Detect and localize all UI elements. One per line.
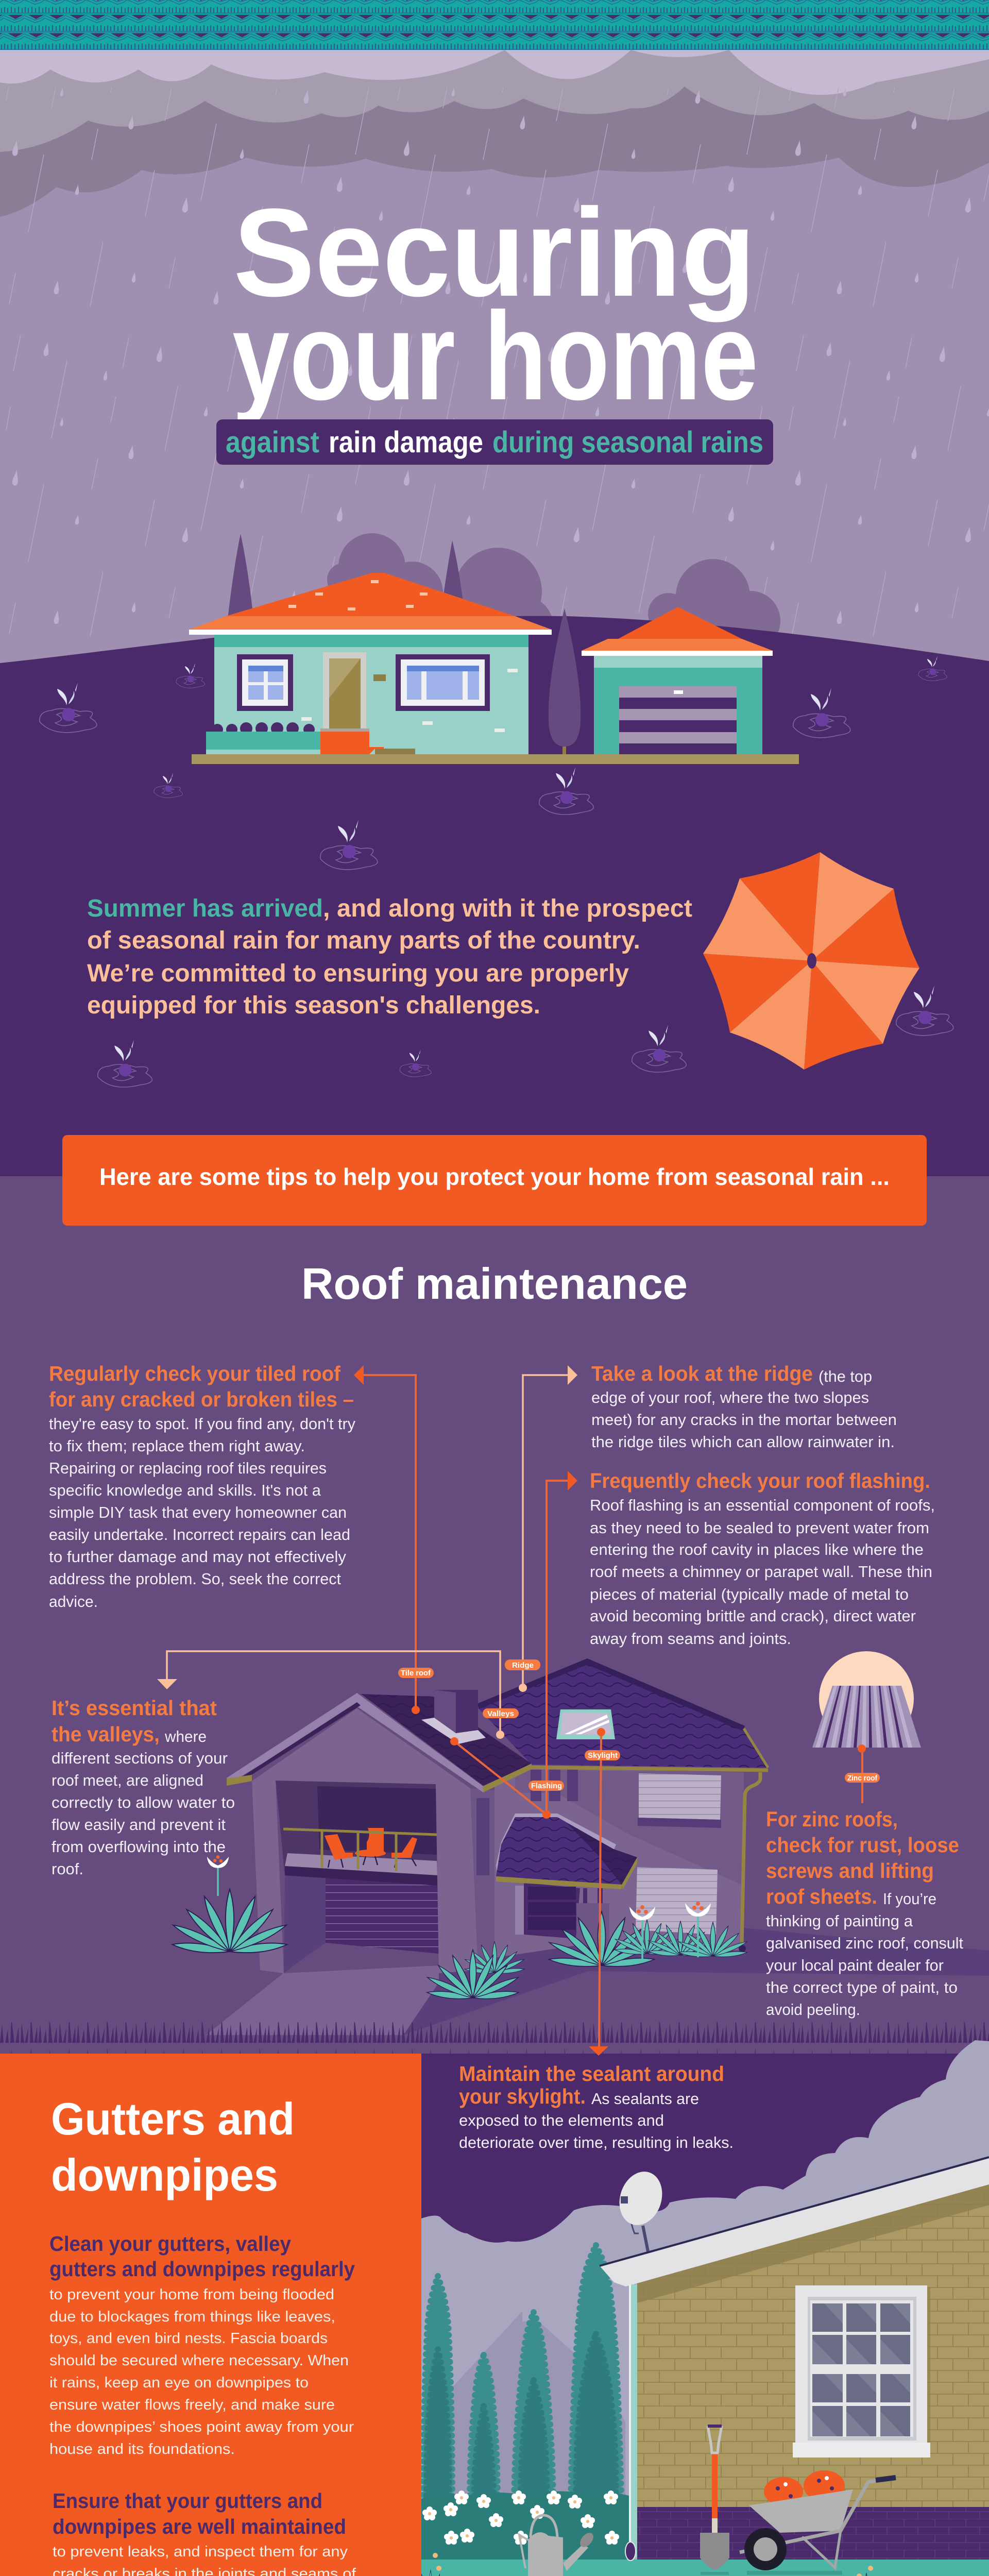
- text: valleys: [52, 1696, 235, 1878]
- arrow: ridge callout: Ridge: [512, 1661, 534, 1670]
- subtitle bar: against: [226, 426, 319, 459]
- subtitle bar: [216, 419, 773, 465]
- text: flashing: Roof flashing is an essential component of roofs,: [590, 1496, 935, 1514]
- text: flashing: avoid becoming brittle and crack), direct water: [590, 1607, 916, 1625]
- arrow: tile roof callout: Tile roof: [401, 1669, 431, 1677]
- text: valleys: from overflowing into the: [52, 1838, 226, 1856]
- text: zinc roofs: roof sheets.: [766, 1885, 877, 1908]
- gutter and roof edge: [600, 2157, 989, 2286]
- text: zinc roofs: avoid peeling.: [766, 2001, 860, 2019]
- text: tiled roof: Regularly check your tiled roof: [49, 1362, 340, 1385]
- text: zinc roofs: the correct type of paint, to: [766, 1978, 958, 1996]
- text: well maintained: downpipes are well maintained: [53, 2515, 346, 2538]
- text: ridge: Take a look at the ridge: [591, 1362, 813, 1385]
- roof house illustration: [171, 1662, 768, 2035]
- tips banner: [62, 1135, 927, 1226]
- text: clean gutters: it rains, keep an eye on downpipes to: [49, 2375, 309, 2391]
- text: clean gutters: the downpipes’ shoes point away from your: [49, 2419, 354, 2435]
- watering can: [519, 2515, 596, 2576]
- house illustration: [189, 573, 799, 764]
- upper shutter window: [638, 1773, 721, 1828]
- text: clean gutters: Clean your gutters, valley: [49, 2232, 291, 2256]
- text: ridge: meet) for any cracks in the mortar between: [591, 1411, 897, 1429]
- text: valleys: where: [164, 1727, 207, 1745]
- arrow: flashing callout: [450, 1471, 577, 1819]
- text: zinc roofs: your local paint dealer for: [766, 1956, 944, 1974]
- text: zinc roofs: If you’re: [883, 1890, 936, 1908]
- downpipe: [625, 2284, 637, 2561]
- roof maintenance section background: [0, 1176, 989, 2054]
- cypress trees: [423, 2245, 621, 2498]
- text: tiled roof: to fix them; replace them right away.: [49, 1437, 305, 1455]
- skylight: [556, 1709, 615, 1739]
- text: well maintained: to prevent leaks, and inspect them for any: [53, 2544, 348, 2560]
- text: tiled roof: specific knowledge and skills. It's not a: [49, 1481, 321, 1499]
- text: clean gutters: should be secured where necessary. When: [49, 2352, 349, 2369]
- panel: gutters and downpipes: [0, 2054, 421, 2576]
- satellite dish: [613, 2166, 669, 2251]
- text: valleys: It’s essential that: [52, 1696, 217, 1720]
- text: zinc roofs: thinking of painting a: [766, 1912, 913, 1930]
- text: flashing: Frequently check your roof flashing.: [590, 1469, 930, 1493]
- text: valleys: roof meet, are aligned: [52, 1771, 203, 1789]
- driveway: [206, 1965, 439, 2035]
- intro text: of seasonal rain for many parts of the country.: [87, 927, 640, 954]
- text: well maintained: [53, 2489, 356, 2576]
- text: tiled roof: address the problem. So, seek the correct: [49, 1570, 341, 1588]
- text: ridge: (the top: [819, 1367, 872, 1385]
- heading: roof maintenance: Roof maintenance: [301, 1260, 688, 1309]
- hero: rainy sky: [0, 50, 989, 694]
- right wing wall: [494, 1768, 744, 1958]
- text: skylight: Maintain the sealant around: [459, 2062, 724, 2086]
- lower shutter window: [636, 1867, 718, 1935]
- text: tiled roof: to further damage and may not effectively: [49, 1548, 347, 1566]
- rock and ground plants: [410, 2553, 897, 2576]
- upper right roof: [478, 1662, 768, 1770]
- garage: [582, 607, 773, 754]
- right window: [396, 654, 490, 711]
- intro text: We’re committed to ensuring you are properly: [87, 960, 629, 987]
- heading: gutters: [51, 2093, 295, 2200]
- gable wall with balcony: [252, 1708, 494, 1973]
- text: clean gutters: gutters and downpipes regularly: [49, 2257, 355, 2281]
- icon: umbrella: [703, 852, 919, 1070]
- text: flashing: as they need to be sealed to prevent water from: [590, 1519, 929, 1537]
- text: flashing: pieces of material (typically made of metal to: [590, 1585, 909, 1603]
- tips banner: Here are some tips to help you protect your home from seasonal rain ...: [99, 1163, 890, 1190]
- text: tiled roof: [49, 1362, 355, 1611]
- hill and dark ground: [0, 533, 989, 1176]
- left window: [237, 654, 293, 711]
- text: skylight: As sealants are: [591, 2090, 699, 2108]
- flowering hedge: [421, 2490, 631, 2560]
- shovel: [700, 2425, 729, 2575]
- chimney: [421, 1690, 486, 1744]
- text: flashing: [590, 1469, 935, 1648]
- text: skylight: [459, 2062, 734, 2151]
- text: well maintained: Ensure that your gutters and: [53, 2489, 322, 2513]
- text: zinc roofs: [766, 1807, 963, 2019]
- text: tiled roof: easily undertake. Incorrect repairs can lead: [49, 1526, 350, 1544]
- text: skylight: deteriorate over time, resulting in leaks.: [459, 2133, 734, 2151]
- subtitle bar: during seasonal rains: [492, 426, 763, 459]
- text: zinc roofs: screws and lifting: [766, 1859, 934, 1883]
- window: [793, 2285, 930, 2458]
- text: valleys: correctly to allow water to: [52, 1793, 235, 1811]
- text: clean gutters: house and its foundations.: [49, 2441, 235, 2458]
- text: clean gutters: [49, 2232, 355, 2458]
- text: zinc roofs: For zinc roofs,: [766, 1807, 898, 1831]
- heading: gutters: downpipes: [51, 2149, 278, 2200]
- text: tiled roof: they're easy to spot. If you find any, don't try: [49, 1415, 355, 1433]
- gutter downpipe: [739, 1772, 760, 1952]
- title: your home: [232, 286, 758, 426]
- arrow: ridge callout: [505, 1365, 577, 1692]
- decorative white flowers: [207, 1855, 711, 1959]
- intro text: equipped for this season's challenges.: [87, 992, 540, 1019]
- lower garage and pillar: [515, 1883, 609, 1947]
- cypress tree: [549, 608, 581, 754]
- arrow: tile roof callout: [354, 1365, 434, 1714]
- text: zinc roofs: galvanised zinc roof, consult: [766, 1934, 963, 1952]
- text: ridge: [591, 1362, 897, 1451]
- text: tiled roof: simple DIY task that every homeowner can: [49, 1503, 347, 1521]
- heading: gutters: Gutters and: [51, 2093, 295, 2144]
- text: zinc roofs: check for rust, loose: [766, 1833, 959, 1857]
- ground shading: [403, 1928, 989, 2035]
- text: flashing: roof meets a chimney or parapet wall. These thin: [590, 1563, 932, 1581]
- lawn: [421, 2560, 989, 2576]
- title: [232, 183, 758, 426]
- gutters scene: [410, 2040, 989, 2576]
- arrow: skylight callout: Skylight: [588, 1751, 618, 1760]
- intro text: , and along with it the prospect: [323, 895, 692, 922]
- lower roof: [496, 1814, 637, 1889]
- background clouds: [421, 2040, 989, 2560]
- text: valleys: the valleys,: [52, 1722, 160, 1746]
- main house roof: [189, 573, 552, 635]
- text: flashing: entering the roof cavity in places like where the: [590, 1540, 924, 1558]
- text: flashing: away from seams and joints.: [590, 1630, 791, 1648]
- roof tile border: [0, 0, 989, 50]
- grass strip: [0, 2022, 989, 2054]
- text: tiled roof: advice.: [49, 1592, 98, 1611]
- text: clean gutters: due to blockages from things like leaves,: [49, 2309, 335, 2325]
- front door: [323, 652, 386, 728]
- text: tiled roof: Repairing or replacing roof tiles requires: [49, 1459, 327, 1477]
- text: valleys: roof.: [52, 1860, 83, 1878]
- text: clean gutters: to prevent your home from being flooded: [49, 2286, 334, 2303]
- arrow: zinc roof callout: [845, 1744, 880, 1803]
- arrow: flashing callout: Flashing: [531, 1782, 562, 1790]
- rain splashes: [40, 656, 953, 1087]
- main house walls: [214, 635, 528, 754]
- arrow: valleys callout: Valleys: [487, 1709, 514, 1718]
- arrow: skylight callout: [585, 1728, 620, 2056]
- text: clean gutters: toys, and even bird nests. Fascia boards: [49, 2330, 328, 2347]
- text: ridge: the ridge tiles which can allow rainwater in.: [591, 1433, 895, 1451]
- agave plants: [171, 1889, 748, 2001]
- ground strip: [192, 754, 799, 764]
- zinc roof illustration: [812, 1651, 921, 1748]
- text: ridge: edge of your roof, where the two slopes: [591, 1388, 869, 1406]
- gable roof: [227, 1693, 532, 1792]
- text: clean gutters: ensure water flows freely, and make sure: [49, 2397, 335, 2413]
- arrow: valleys callout: [157, 1651, 519, 1739]
- text: tiled roof: for any cracked or broken tiles –: [49, 1387, 354, 1411]
- text: skylight: your skylight.: [459, 2084, 586, 2108]
- wheelbarrow: [740, 2470, 896, 2575]
- balcony rail and chairs: [283, 1828, 437, 1871]
- subtitle bar: rain damage: [329, 426, 483, 459]
- arrow: zinc roof callout: Zinc roof: [847, 1774, 878, 1783]
- title: Securing: [233, 183, 756, 323]
- brick wall: [637, 2175, 989, 2560]
- text: valleys: different sections of your: [52, 1749, 228, 1767]
- text: valleys: flow easily and prevent it: [52, 1816, 226, 1834]
- intro text: [87, 895, 692, 1019]
- planter and steps: [206, 722, 415, 754]
- intro text: Summer has arrived: [87, 895, 323, 922]
- text: skylight: exposed to the elements and: [459, 2111, 664, 2129]
